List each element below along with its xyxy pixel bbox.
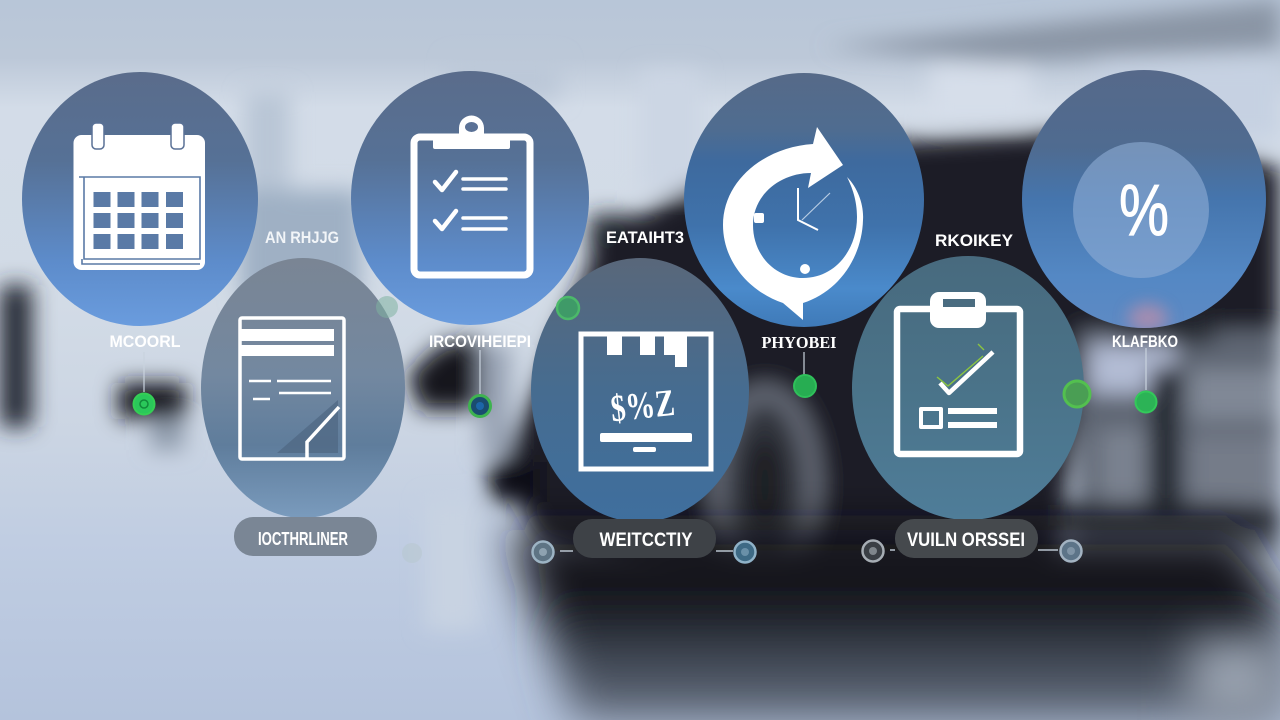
icon: document: [240, 318, 344, 459]
labels: top row: [110, 228, 1178, 352]
pill label 2: WEITCCTIY: [600, 530, 693, 551]
circle 2: clipboard checklist: [351, 71, 589, 325]
lower circle 2: bill with amount: $%Z: [609, 382, 677, 430]
icon: clipboard with checks: [414, 116, 530, 275]
labels: top row: AN RHJJG: [265, 228, 339, 247]
lower circle 2: bill with amount: [531, 258, 749, 522]
glow: [1128, 304, 1168, 332]
circle 3: clock with circular arrow: [684, 73, 924, 327]
inner disc: [1073, 142, 1209, 278]
icon: circular arrow and clock: [723, 127, 863, 320]
pill label 1: IOCTHRLINER: [258, 529, 348, 549]
labels: top row: PHYOBEI: [762, 333, 837, 352]
icon: invoice: [581, 334, 711, 469]
lower circle 3: clipboard with check: [852, 256, 1084, 520]
labels: top row: MCOORL: [110, 332, 180, 351]
icon: calendar: [74, 123, 205, 270]
labels: top row: EATAIHT3: [606, 228, 684, 247]
circle 4: percent: [1022, 70, 1266, 332]
connectors and green markers: [134, 296, 1156, 563]
labels: top row: KLAFBKO: [1112, 332, 1178, 351]
pill label 1: [234, 517, 377, 556]
pill label 3: [895, 519, 1038, 558]
circle 1: calendar: [22, 72, 258, 326]
icon: clipboard and check: [897, 292, 1020, 454]
pill label 2: [573, 519, 716, 558]
labels: top row: RKOIKEY: [935, 231, 1014, 250]
labels: top row: IRCOVIHEIEPI: [429, 332, 531, 351]
lower circle 1: document: [201, 258, 405, 518]
pill label 3: VUILN ORSSEI: [907, 530, 1025, 551]
icon: percent glyph: %: [1119, 169, 1169, 251]
